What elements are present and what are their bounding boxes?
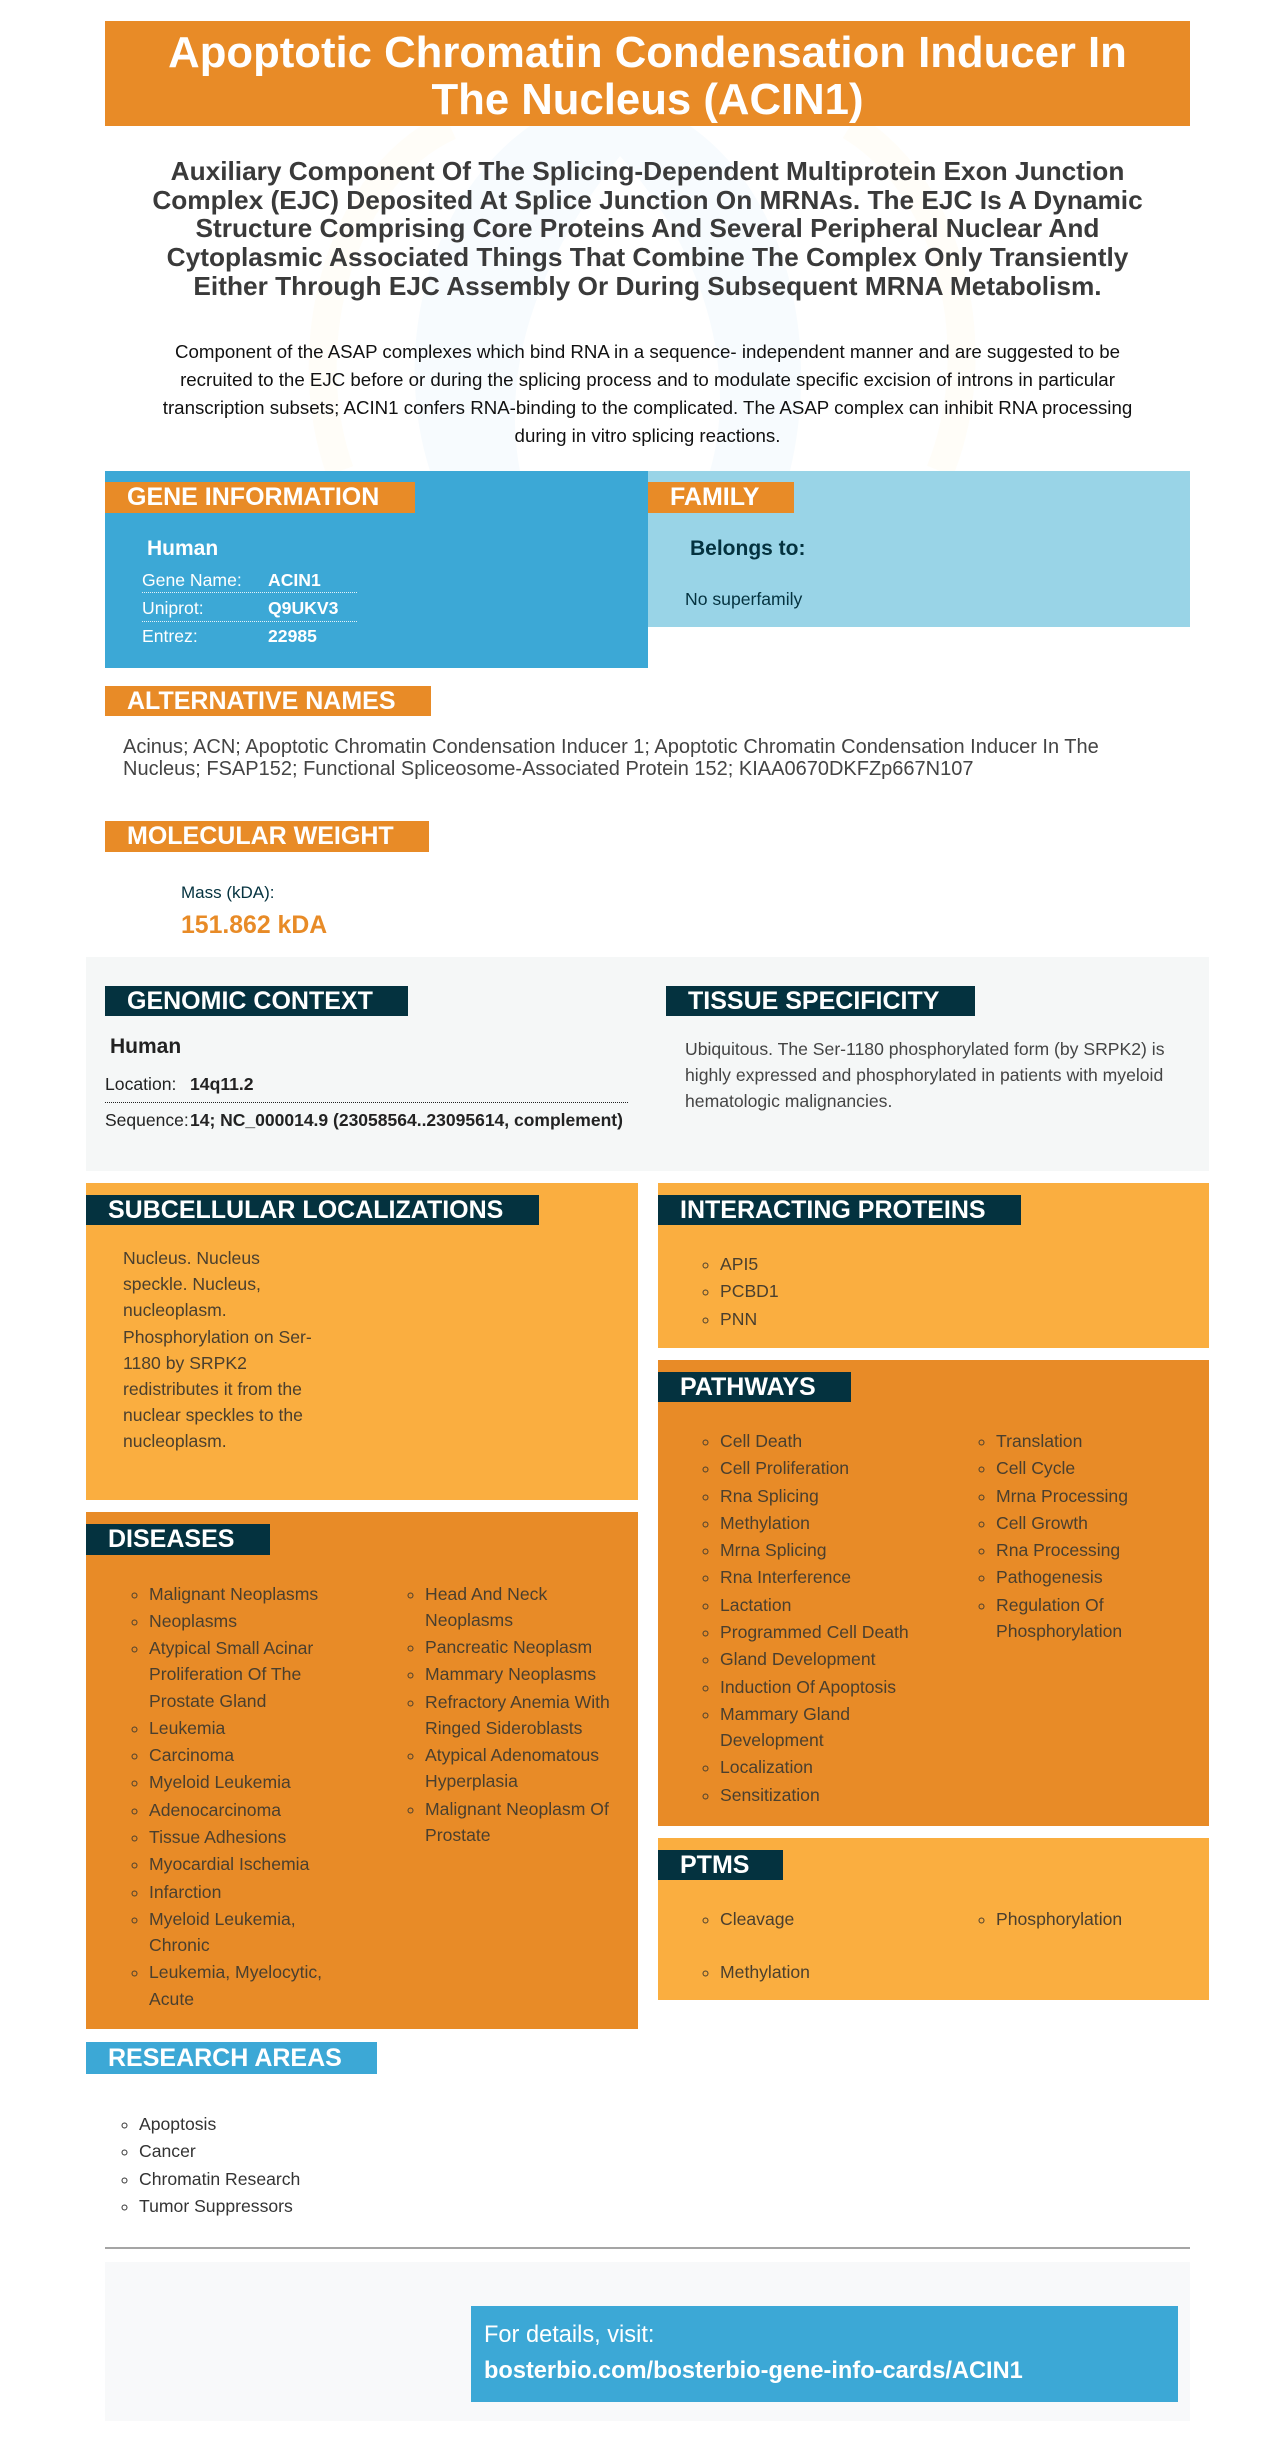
panel: genomic context and tissue specificity [86, 957, 1209, 1171]
subcellular text: Nucleus. Nucleus [123, 1248, 260, 1268]
tissue specificity text: Ubiquitous. The Ser-1180 phosphorylated form (by SRPK2) is [685, 1039, 1165, 1059]
diseases list column 2: Head And Neck [425, 1584, 547, 1604]
belongs to label: Belongs to: [690, 537, 806, 560]
uniprot row: Uniprot: [142, 598, 204, 618]
callout url: bosterbio.com/bosterbio-gene-info-cards/ACIN1 [484, 2358, 1023, 2384]
entrez row: 22985 [268, 626, 317, 646]
pathways list column 1: Rna Interference [720, 1567, 851, 1587]
heading: ptms [658, 1850, 783, 1880]
diseases list column 1: Myocardial Ischemia [149, 1854, 309, 1874]
summary paragraph: Component of the ASAP complexes which bind RNA in a sequence- independent manner and are suggested to be [175, 341, 1120, 362]
diseases list column 1: Myeloid Leukemia [149, 1772, 291, 1792]
subtitle: Either Through EJC Assembly Or During Subsequent MRNA Metabolism. [193, 271, 1102, 301]
gene name row [142, 569, 357, 593]
subcellular text: redistributes it from the [123, 1379, 302, 1399]
heading: genomic context: GENOMIC CONTEXT [127, 987, 373, 1015]
subtitle: Structure Comprising Core Proteins And Several Peripheral Nuclear And [196, 213, 1099, 243]
pathways list column 1: Methylation [720, 1513, 810, 1533]
diseases list column 2: Hyperplasia [425, 1771, 518, 1791]
subtitle [152, 156, 1143, 301]
diseases list column 2: Atypical Adenomatous [425, 1745, 599, 1765]
subcellular text: nucleoplasm. [123, 1300, 227, 1320]
interacting proteins list: PNN [720, 1309, 757, 1329]
callout: details link [471, 2306, 1178, 2402]
subcellular text [123, 1248, 312, 1451]
research areas list [122, 2114, 300, 2216]
ptms list column 1: Cleavage [720, 1908, 794, 1928]
heading: diseases: DISEASES [108, 1525, 234, 1553]
tissue specificity text: hematologic malignancies. [685, 1091, 892, 1111]
subcellular text: Phosphorylation on Ser- [123, 1327, 312, 1347]
subtitle: Auxiliary Component Of The Splicing-Dependent Multiprotein Exon Junction [171, 156, 1124, 186]
interacting proteins list: PCBD1 [720, 1281, 779, 1301]
family value: No superfamily [685, 589, 802, 609]
panel: pathways [658, 1360, 1209, 1826]
heading: alternative names: ALTERNATIVE NAMES [127, 687, 396, 715]
alternative names text [123, 736, 1099, 780]
panel: subcellular localizations [86, 1183, 638, 1500]
diseases list column 1: Infarction [149, 1882, 221, 1902]
diseases list column 1: Carcinoma [149, 1745, 234, 1765]
subtitle: Complex (EJC) Deposited At Splice Junction On MRNAs. The EJC Is A Dynamic [152, 185, 1143, 215]
heading: family [648, 482, 794, 513]
pathways list column 1: Lactation [720, 1595, 791, 1615]
species label: Human [110, 1035, 181, 1058]
pathways list column 1: Cell Proliferation [720, 1458, 849, 1478]
diseases list column 1: Acute [149, 1989, 194, 2009]
panel: footer [105, 2262, 1190, 2421]
pathways list column 1: Induction Of Apoptosis [720, 1677, 896, 1697]
heading: research areas: RESEARCH AREAS [108, 2044, 342, 2072]
heading: pathways [658, 1372, 851, 1402]
pathways list column 2: Cell Growth [996, 1513, 1088, 1533]
heading: family: FAMILY [670, 483, 759, 511]
research areas list: Cancer [139, 2141, 196, 2161]
summary paragraph: recruited to the EJC before or during the splicing process and to modulate specific excision of introns in particular [180, 369, 1115, 390]
heading: gene information: GENE INFORMATION [127, 483, 379, 511]
title: The Nucleus (ACIN1) [431, 75, 864, 124]
gene name row: Gene Name: [142, 570, 242, 590]
title [105, 21, 1190, 126]
subtitle: Cytoplasmic Associated Things That Combine The Complex Only Transiently [167, 242, 1128, 272]
tissue specificity text [685, 1039, 1165, 1111]
pathways list column 1: Localization [720, 1757, 813, 1777]
callout label: For details, visit: [484, 2322, 654, 2348]
pathways list column 2: Mrna Processing [996, 1486, 1128, 1506]
watermark logo [300, 126, 1000, 471]
pathways list column 1 [702, 1431, 909, 1805]
diseases list column 1: Neoplasms [149, 1611, 237, 1631]
diseases list column 2: Mammary Neoplasms [425, 1664, 596, 1684]
pathways list column 1: Development [720, 1730, 824, 1750]
heading: ptms: PTMS [680, 1851, 749, 1879]
subcellular text: nucleoplasm. [123, 1431, 227, 1451]
diseases list column 2: Ringed Sideroblasts [425, 1718, 582, 1738]
pathways list column 1: Gland Development [720, 1649, 876, 1669]
pathways list column 2: Phosphorylation [996, 1621, 1122, 1641]
ptms list column 2: Phosphorylation [996, 1908, 1122, 1928]
location row [105, 1073, 628, 1103]
ptms list column 1: Methylation [720, 1962, 810, 1982]
diseases list column 2: Neoplasms [425, 1610, 513, 1630]
pathways list column 1: Rna Splicing [720, 1486, 819, 1506]
panel: gene information [105, 471, 648, 668]
summary paragraph: transcription subsets; ACIN1 confers RNA-binding to the complicated. The ASAP complex can inhibit RNA processing [163, 397, 1132, 418]
diseases list column 1: Adenocarcinoma [149, 1800, 281, 1820]
pathways list column 1: Sensitization [720, 1785, 820, 1805]
panel: diseases [86, 1512, 638, 2029]
research areas list: Tumor Suppressors [139, 2196, 293, 2216]
heading: subcellular localizations: SUBCELLULAR LOCALIZATIONS [108, 1196, 503, 1224]
heading: tissue specificity: TISSUE SPECIFICITY [688, 987, 939, 1015]
diseases list column 2: Pancreatic Neoplasm [425, 1637, 592, 1657]
heading: diseases [86, 1524, 270, 1555]
pathways list column 1: Cell Death [720, 1431, 802, 1451]
alternative names text: Acinus; ACN; Apoptotic Chromatin Condensation Inducer 1; Apoptotic Chromatin Condensation Inducer In The [123, 736, 1099, 758]
diseases list column 1: Chronic [149, 1935, 210, 1955]
alternative names text: Nucleus; FSAP152; Functional Spliceosome-Associated Protein 152; KIAA0670DKFZp667N107 [123, 758, 973, 780]
pathways list column 1: Mammary Gland [720, 1704, 850, 1724]
gene name row: ACIN1 [268, 570, 321, 590]
diseases list column 1: Myeloid Leukemia, [149, 1909, 296, 1929]
molecular weight values [181, 883, 327, 939]
pathways list column 2 [978, 1431, 1128, 1641]
pathways list column 2: Translation [996, 1431, 1082, 1451]
panel: interacting proteins [658, 1183, 1209, 1348]
title: Apoptotic Chromatin Condensation Inducer In [168, 28, 1127, 77]
pathways list column 2: Pathogenesis [996, 1567, 1103, 1587]
location row: Location: [105, 1074, 176, 1094]
summary paragraph [163, 341, 1132, 446]
diseases list column 1 [132, 1584, 322, 2009]
uniprot row: Q9UKV3 [268, 598, 338, 618]
pathways list column 2: Regulation Of [996, 1595, 1104, 1615]
interacting proteins list [702, 1254, 779, 1329]
diseases list column 2: Refractory Anemia With [425, 1692, 610, 1712]
entrez row: Entrez: [142, 626, 198, 646]
subcellular text: 1180 by SRPK2 [123, 1353, 247, 1373]
research areas list: Chromatin Research [139, 2169, 300, 2189]
heading: pathways: PATHWAYS [680, 1373, 816, 1401]
uniprot row [142, 597, 357, 622]
summary paragraph: during in vitro splicing reactions. [515, 425, 780, 446]
mass label: Mass (kDA): [181, 883, 274, 902]
diseases list column 1: Proliferation Of The [149, 1664, 301, 1684]
diseases list column 2: Malignant Neoplasm Of [425, 1799, 609, 1819]
ptms list column 1 [702, 1908, 810, 1982]
tissue specificity text: highly expressed and phosphorylated in patients with myeloid [685, 1065, 1163, 1085]
heading: interacting proteins: INTERACTING PROTEINS [680, 1196, 986, 1224]
entrez row [142, 626, 317, 646]
subcellular text: nuclear speckles to the [123, 1405, 303, 1425]
research areas list: Apoptosis [139, 2114, 216, 2134]
panel: family [648, 471, 1190, 627]
diseases list column 1: Atypical Small Acinar [149, 1638, 313, 1658]
diseases list column 2: Prostate [425, 1825, 491, 1845]
mass value: 151.862 kDA [181, 912, 327, 939]
subcellular text: speckle. Nucleus, [123, 1274, 261, 1294]
pathways list column 1: Programmed Cell Death [720, 1622, 909, 1642]
diseases list column 1: Tissue Adhesions [149, 1827, 286, 1847]
sequence row: 14; NC_000014.9 (23058564..23095614, complement) [190, 1110, 623, 1130]
heading: molecular weight: MOLECULAR WEIGHT [127, 822, 394, 850]
pathways list column 1: Mrna Splicing [720, 1540, 827, 1560]
sequence row: Sequence: [105, 1110, 189, 1130]
pathways list column 2: Rna Processing [996, 1540, 1120, 1560]
interacting proteins list: API5 [720, 1254, 758, 1274]
diseases list column 1: Prostate Gland [149, 1690, 266, 1710]
species label: Human [147, 537, 218, 560]
panel: ptms [658, 1838, 1209, 2000]
diseases list column 2 [408, 1584, 610, 1845]
diseases list column 1: Leukemia [149, 1718, 225, 1738]
pathways list column 2: Cell Cycle [996, 1458, 1075, 1478]
diseases list column 1: Leukemia, Myelocytic, [149, 1962, 322, 1982]
location row: 14q11.2 [190, 1074, 254, 1094]
diseases list column 1: Malignant Neoplasms [149, 1584, 318, 1604]
